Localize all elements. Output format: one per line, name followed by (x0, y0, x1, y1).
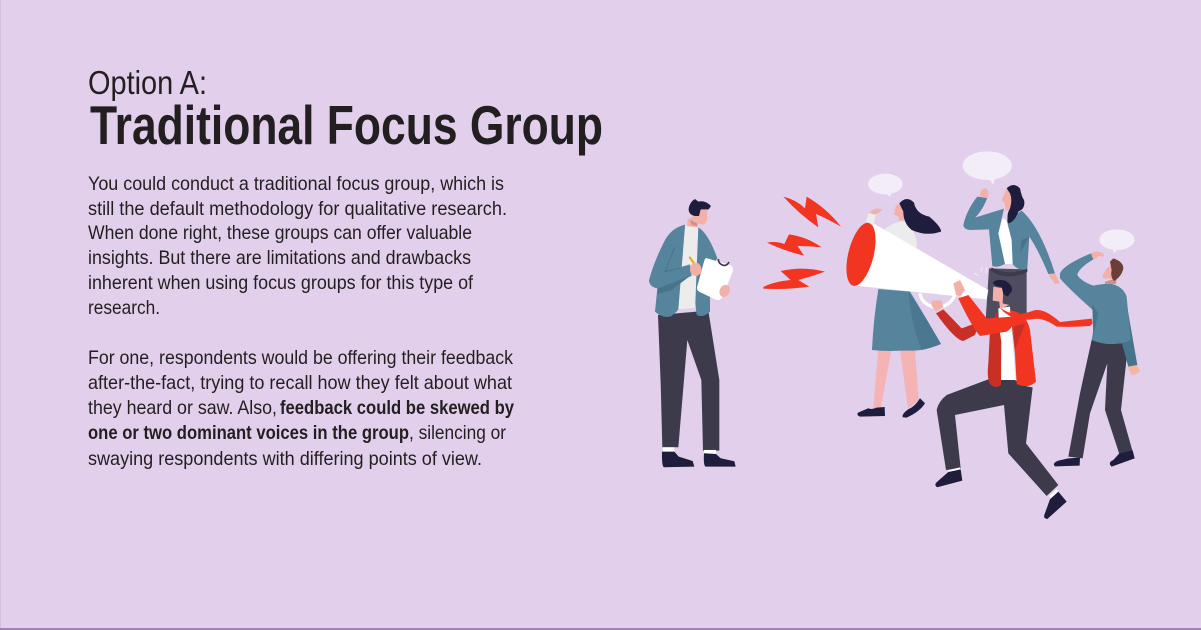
bolt bottom (763, 269, 825, 289)
speech bubble (868, 174, 903, 197)
heading (88, 64, 603, 156)
speech bubble (963, 151, 1012, 185)
bolt top (783, 197, 841, 227)
text block: second paragraph: For one, respondents would be offering their feedback (88, 347, 513, 369)
heading line: option label: Option A: (88, 64, 207, 101)
upper body (1060, 229, 1140, 375)
figure: woman with megaphone (857, 174, 941, 418)
bolt middle (767, 234, 822, 256)
text block: second paragraph (88, 347, 514, 470)
text block: second paragraph: one or two dominant voices in the group (88, 422, 409, 444)
text block: second paragraph: after-the-fact, trying to recall how they felt about what (88, 372, 513, 394)
text block: second paragraph: feedback could be skewed by (280, 397, 514, 419)
text block: second paragraph: swaying respondents with differing points of view. (88, 448, 482, 470)
text block: first paragraph: research. (88, 297, 160, 319)
text block: first paragraph: inherent when using focus groups for this type of (88, 272, 474, 294)
figure: man with raised arm (1054, 229, 1140, 467)
tie (1000, 307, 1093, 327)
text block: first paragraph: When done right, these groups can offer valuable (88, 222, 472, 244)
text block: second paragraph: they heard or saw. Also, (88, 397, 277, 419)
figure: man with clipboard (649, 199, 736, 467)
icon: sound bolts (763, 197, 841, 289)
text block: second paragraph: , silencing or (409, 422, 506, 444)
speech bubble (1099, 229, 1135, 253)
icon: megaphone (841, 220, 988, 308)
text block: first paragraph: You could conduct a traditional focus group, which is (88, 173, 504, 195)
figure: man in red jacket (932, 280, 1093, 519)
legs (873, 348, 892, 408)
text block: first paragraph (88, 173, 507, 319)
heading line: main title: Traditional Focus Group (90, 94, 603, 156)
trousers and shoes (1054, 340, 1135, 467)
figure: standing woman (963, 151, 1060, 320)
text block: first paragraph: still the default methodology for qualitative research. (88, 198, 507, 220)
illustration: focus group scene (649, 151, 1140, 519)
motion marks (974, 267, 987, 276)
text block: first paragraph: insights. But there are limitations and drawbacks (88, 247, 471, 269)
